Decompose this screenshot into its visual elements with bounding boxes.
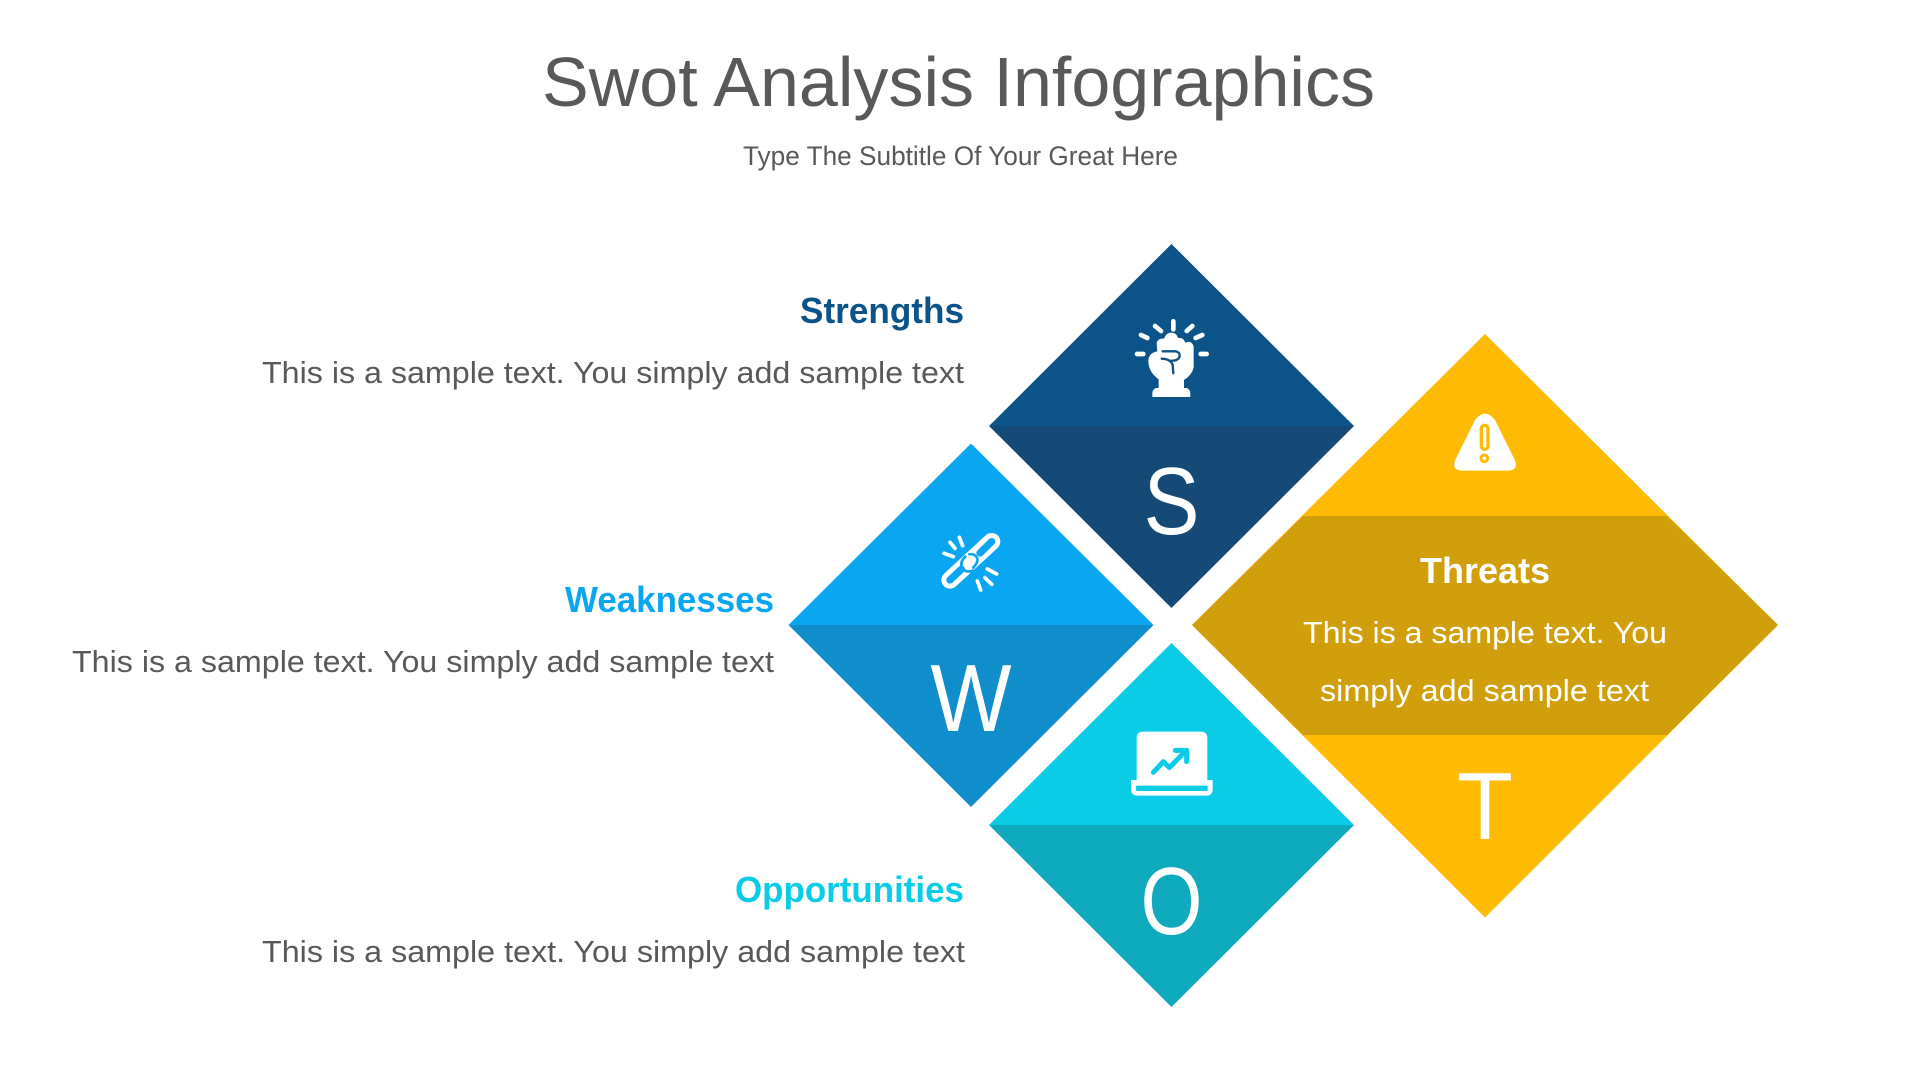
icon: fist [1137,321,1207,397]
weaknesses body: This is a sample text. You simply add sample text [72,644,774,679]
threats body: This is a sample text. You [1303,615,1667,650]
strengths body: This is a sample text. You simply add sample text [262,355,964,390]
icon: broken chain link [944,537,997,590]
panel: strengths text [262,290,964,390]
letter T: T [1457,753,1513,860]
panel: strengths diamond [989,244,1354,608]
panel: weaknesses text [72,579,774,679]
subtitle: Type The Subtitle Of Your Great Here [743,141,1178,171]
letter O: O [1140,848,1202,955]
threats heading: Threats [1420,550,1550,591]
panel: threats diamond [1192,334,1778,918]
panel: weaknesses diamond [788,444,1154,807]
opportunities body: This is a sample text. You simply add sample text [262,934,965,969]
opportunities heading: Opportunities [735,869,964,910]
threats band [1192,516,1778,735]
icon: laptop with growth arrow [1131,732,1213,796]
panel: opportunities diamond [989,643,1354,1007]
title: Swot Analysis Infographics [542,43,1375,121]
icon: warning triangle [1454,414,1516,471]
weaknesses heading: Weaknesses [565,579,774,620]
strengths heading: Strengths [800,290,964,331]
threats body [1303,615,1667,708]
panel: opportunities text [262,869,965,969]
letter S: S [1144,448,1200,555]
threats body: simply add sample text [1320,673,1649,708]
letter W: W [930,645,1012,752]
